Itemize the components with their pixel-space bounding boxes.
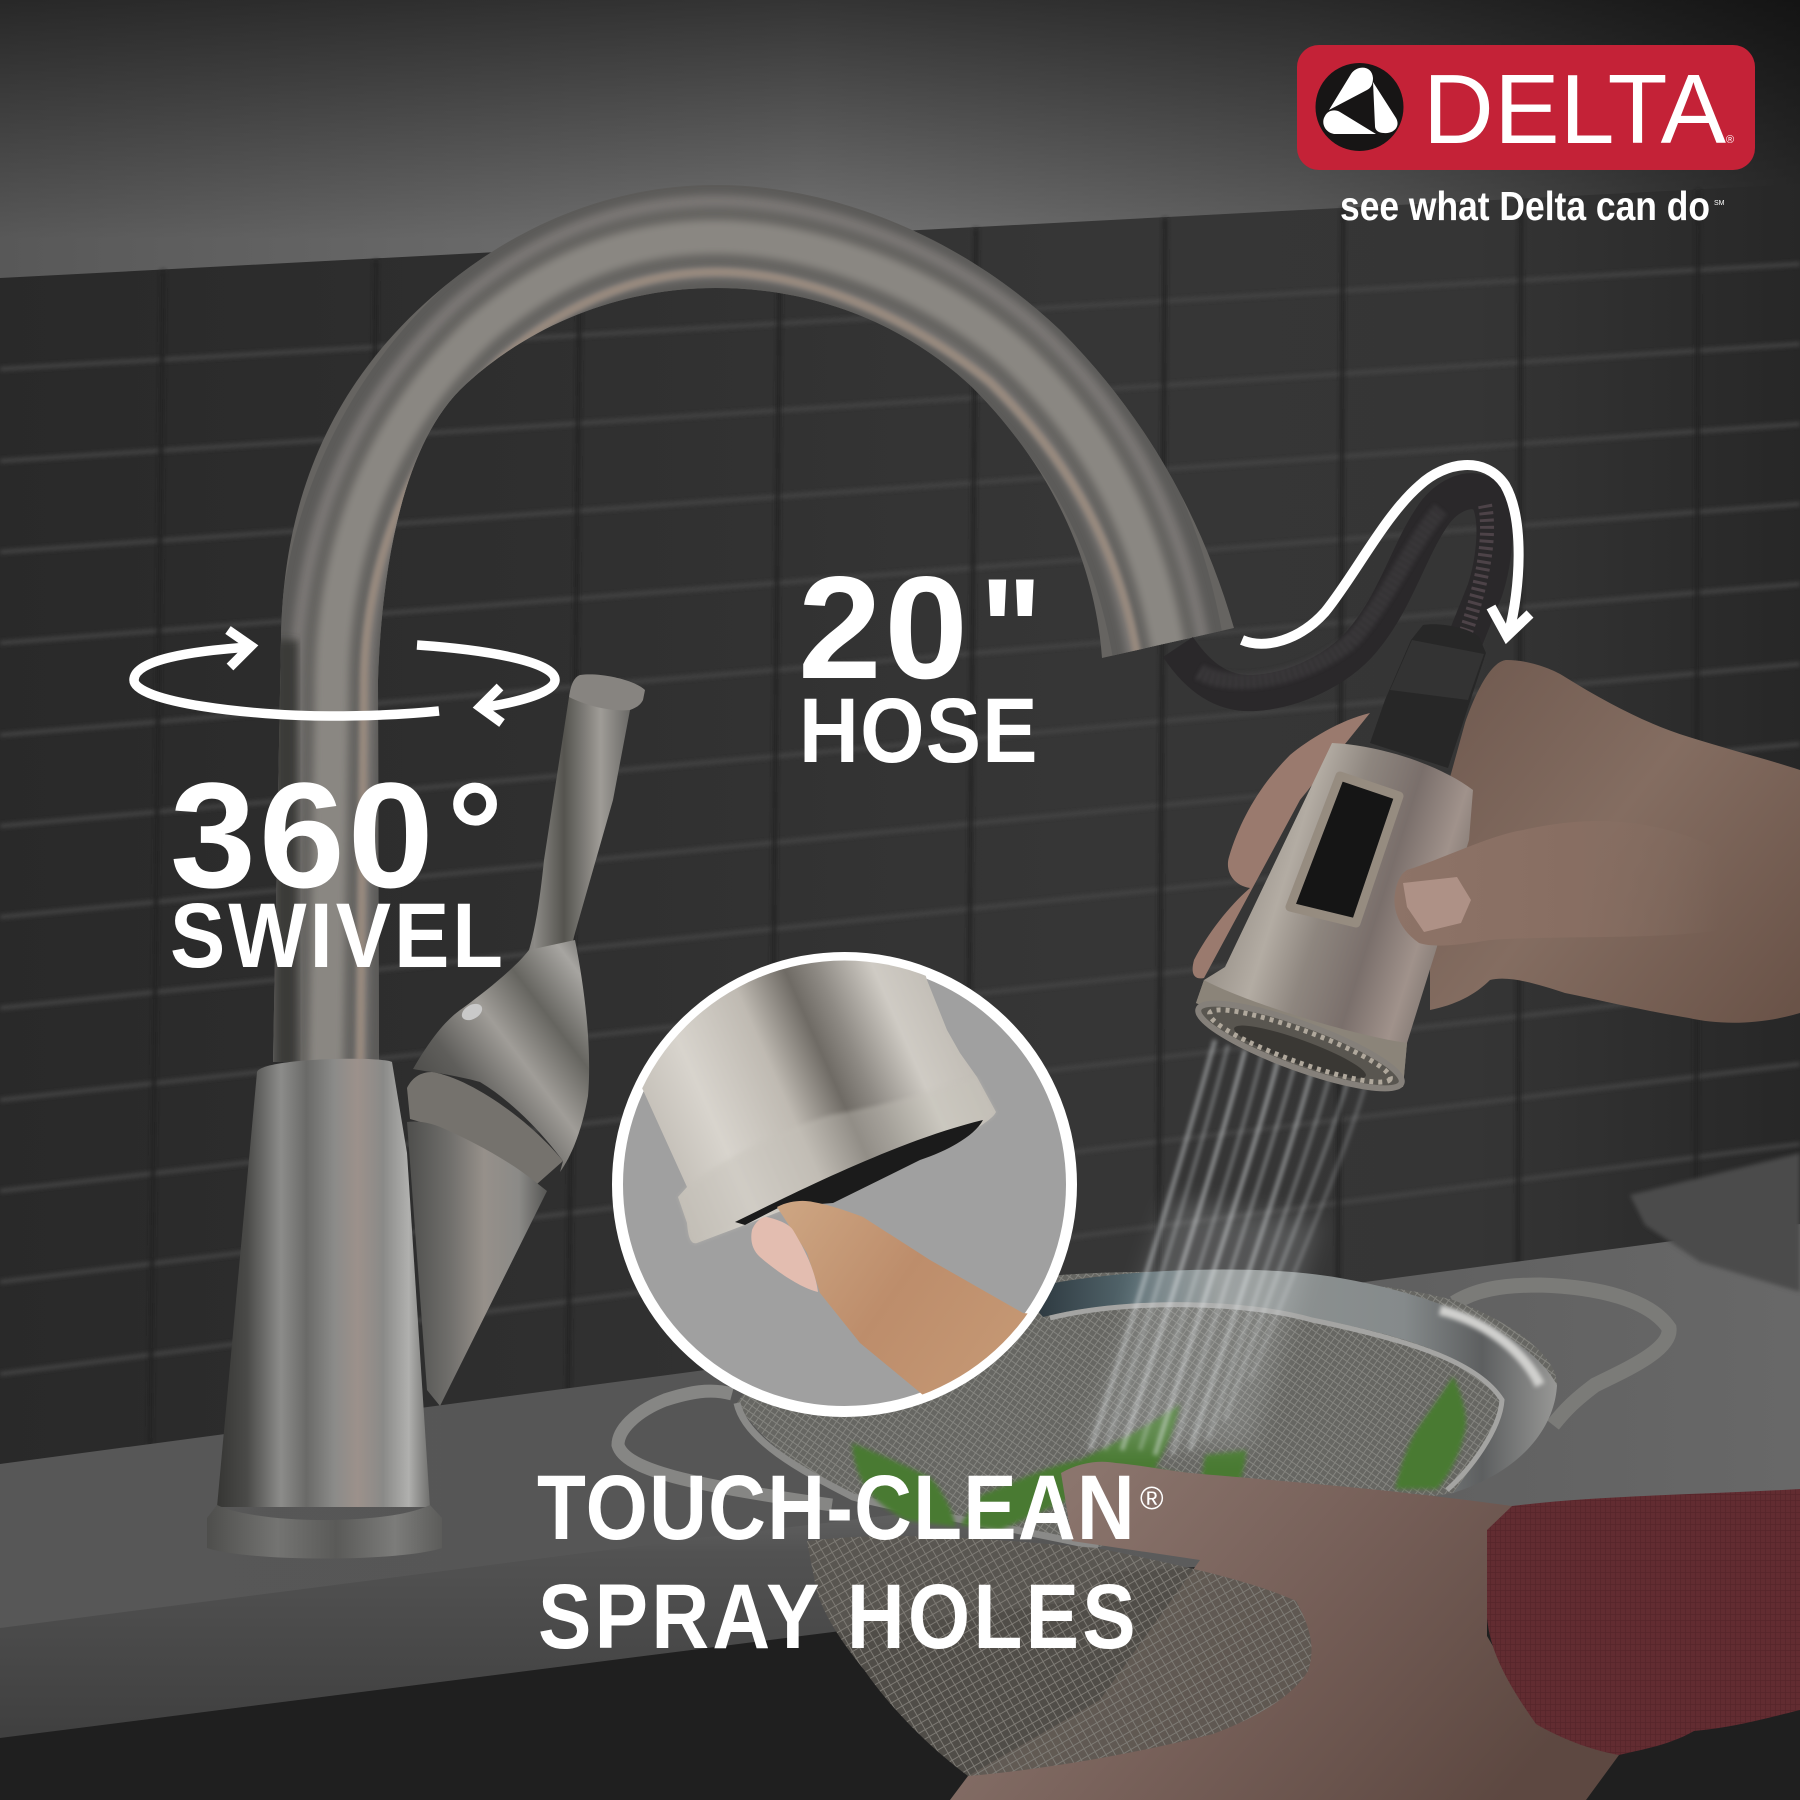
heading: touch-clean spray holes [537,1457,1164,1668]
logo: registered mark: ® [1726,134,1734,146]
background: ceiling band [0,0,1800,300]
arrow: hose path [1242,465,1530,644]
hand: thumb over sprayer [1394,821,1720,946]
logo: red badge [1297,45,1755,170]
spray head: black connector [1370,624,1486,768]
colander: left handle [618,1391,832,1505]
heading: touch-clean spray holes: SPRAY HOLES [538,1566,1136,1668]
knit sleeve [1487,1489,1800,1755]
braided hose [1178,491,1494,693]
logo: wordmark: DELTA [1423,54,1727,164]
heading: 360 degree swivel: SWIVEL [170,884,503,987]
colander: green beans [852,1376,1466,1530]
heading: 360 degree swivel: ° [447,753,503,910]
water spray [1086,1040,1365,1455]
logo: Delta brand block [1297,45,1755,229]
icon: Delta triangle mark [1316,63,1404,151]
inset: white ring and gray field [618,958,1072,1412]
heading: touch-clean spray holes: TOUCH-CLEAN [537,1457,1135,1559]
logo: service mark: SM [1714,200,1725,207]
spray head: brushed body [1191,743,1473,1104]
background: tiled wall [0,184,1800,1465]
back hand holding the spray head [1193,660,1800,1023]
colander: mesh interior [737,1272,1557,1547]
inner-edge warm band [360,272,1138,1070]
faucet: handle ball [413,940,589,1172]
arrow: 360 swivel orbit [134,630,555,723]
colander: chrome reflection [1440,1310,1540,1385]
heading: 20 inch hose [798,547,1042,782]
colander [618,1269,1669,1547]
inset: nozzle slit [735,1120,983,1225]
hand: thumb nail [1403,877,1471,932]
heading: 360 degree swivel [170,752,503,987]
inset: finger nail [751,1217,818,1292]
spray head: nozzle face [1191,988,1409,1104]
colander: right handle [1454,1285,1669,1425]
hand: fingers behind sprayer [1193,713,1370,978]
inset: fingertip [751,1200,1028,1394]
colander: metal rim [1020,1269,1557,1493]
inset: touch-clean detail circle [612,952,1077,1417]
heading: 20 inch hose: HOSE [799,679,1038,782]
faucet: handle collar [407,1072,563,1184]
inset: spray head close-up [642,960,996,1244]
dark left edge of upright [276,640,298,1070]
heading: touch-clean spray holes: ® [1140,1480,1164,1516]
faucet: gooseneck spout [273,185,1234,1070]
heading: 20 inch hose: 20 [798,547,968,710]
heading: 20 inch hose: " [980,549,1042,712]
inset: flared lip shading [806,1101,922,1176]
spray head: toggle button [1290,776,1399,923]
logo: tagline: see what Delta can do [1340,183,1710,229]
front hand [950,1462,1619,1800]
faucet: handle lever [407,674,645,1184]
faucet: lower handle holder [407,1121,547,1406]
heading: 360 degree swivel: 360 [170,752,434,920]
faucet: conical base [207,1059,442,1558]
colander: lower mesh over hand [807,1536,1312,1776]
background: white dish on counter [1630,1153,1800,1292]
hand: palm and wrist [1430,660,1800,1023]
spray head: flared rim [1196,980,1407,1087]
background: counter top [0,1153,1800,1800]
